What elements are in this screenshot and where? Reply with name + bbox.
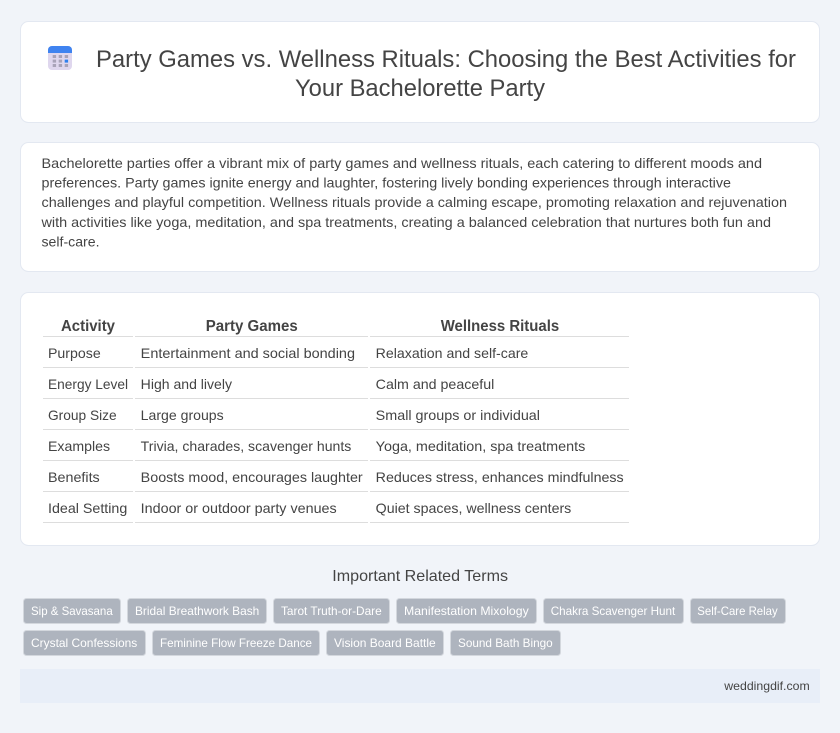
tag: Sip & Savasana: Sip & Savasana — [31, 604, 113, 618]
tag: Vision Board Battle: Vision Board Battle — [334, 636, 436, 650]
tag: Chakra Scavenger Hunt — [544, 598, 684, 624]
tag: Manifestation Mixology: Manifestation Mixology — [404, 604, 529, 618]
footer — [20, 669, 820, 703]
panel: related term tags — [24, 598, 786, 656]
table row: purpose: Purpose — [48, 345, 101, 361]
table row: ideal setting: Quiet spaces, wellness centers — [376, 500, 571, 516]
table row: ideal setting: Indoor or outdoor party venues — [141, 500, 337, 516]
table row: purpose: Entertainment and social bonding — [141, 345, 355, 361]
table row: energy level: Energy Level — [48, 376, 128, 392]
table row: examples — [43, 438, 629, 460]
panel: comparison table — [20, 292, 820, 546]
tag: Feminine Flow Freeze Dance — [152, 630, 320, 656]
tag: Self-Care Relay: Self-Care Relay — [697, 604, 778, 618]
table row: group size — [43, 407, 629, 430]
title: Your Bachelorette Party — [295, 75, 545, 102]
title — [96, 46, 796, 102]
tag: Crystal Confessions: Crystal Confessions — [31, 636, 137, 650]
text block: introduction paragraph: with activities like yoga, meditation, and spa treatments, creating a balanced celebration that nurtures both fun and — [40, 214, 771, 230]
table header: Wellness Rituals — [441, 318, 559, 335]
footer: weddingdif.com — [723, 679, 810, 693]
tag: Tarot Truth-or-Dare — [274, 598, 390, 624]
table header: Activity — [61, 318, 115, 335]
tag: Sound Bath Bingo — [450, 630, 560, 656]
table row: examples: Yoga, meditation, spa treatments — [376, 438, 585, 454]
table row: energy level — [43, 376, 629, 398]
tag: Tarot Truth-or-Dare: Tarot Truth-or-Dare — [281, 604, 382, 618]
table row: ideal setting — [43, 500, 629, 522]
text block: introduction paragraph: self-care. — [42, 233, 100, 249]
tag: Feminine Flow Freeze Dance: Feminine Flow Freeze Dance — [160, 636, 312, 650]
tag: Sound Bath Bingo: Sound Bath Bingo — [458, 636, 553, 650]
tag: Bridal Breathwork Bash: Bridal Breathwork Bash — [135, 604, 259, 618]
table row: purpose: Relaxation and self-care — [376, 345, 529, 361]
tag: Manifestation Mixology — [396, 598, 536, 624]
table row: purpose — [43, 345, 629, 368]
table row: benefits: Boosts mood, encourages laughter — [141, 469, 363, 485]
tag: Chakra Scavenger Hunt: Chakra Scavenger Hunt — [551, 604, 676, 618]
text block: introduction paragraph: challenges and playful competition. Wellness rituals provide a calming escape, promoting relaxation and rejuvenation — [42, 194, 787, 210]
table row: benefits: Benefits — [48, 469, 100, 485]
tag: Self-Care Relay — [690, 598, 786, 624]
tag: Sip & Savasana — [24, 598, 120, 624]
panel: introduction — [20, 142, 820, 272]
table row: ideal setting: Ideal Setting — [48, 500, 127, 516]
table header — [43, 318, 629, 336]
tag: Crystal Confessions — [24, 630, 146, 656]
table header: Party Games — [206, 318, 298, 335]
text block: introduction paragraph: Bachelorette parties offer a vibrant mix of party games and wellness rituals, each catering to different moods and — [42, 155, 762, 171]
table row: energy level: Calm and peaceful — [376, 376, 494, 392]
tag: Bridal Breathwork Bash — [128, 598, 266, 624]
text block: introduction paragraph — [40, 155, 787, 249]
table row: energy level: High and lively — [141, 376, 232, 392]
table row: group size: Group Size — [48, 407, 117, 423]
table row: examples: Trivia, charades, scavenger hunts — [141, 438, 351, 454]
table row: benefits — [43, 469, 629, 492]
table row: group size: Large groups — [141, 407, 224, 423]
table row: group size: Small groups or individual — [376, 407, 540, 423]
table row: examples: Examples — [48, 438, 110, 454]
title: Party Games vs. Wellness Rituals: Choosing the Best Activities for — [96, 46, 796, 73]
tag: Vision Board Battle — [326, 630, 444, 656]
table row: benefits: Reduces stress, enhances mindfulness — [376, 469, 624, 485]
heading: important related terms: Important Related Terms — [332, 568, 508, 585]
icon: calendar — [48, 46, 72, 70]
text block: introduction paragraph: preferences. Party games ignite energy and laughter, fostering lively bonding experiences through interactive — [42, 175, 731, 191]
panel: title card — [20, 22, 820, 122]
